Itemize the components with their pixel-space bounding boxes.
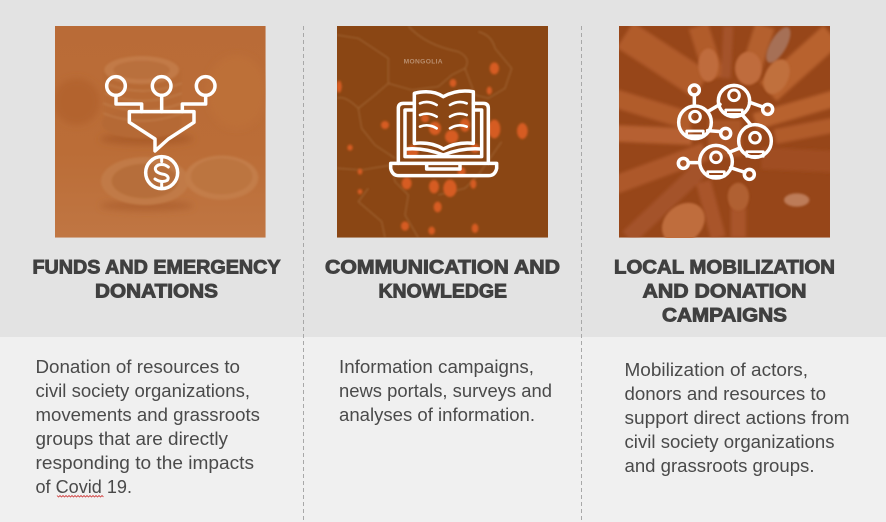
photo: map with orange dots bbox=[336, 26, 548, 238]
text: funds description: movements and grassroots bbox=[36, 404, 260, 425]
text: funds description: groups that are directly bbox=[36, 428, 229, 449]
text: funds description: civil society organizations, bbox=[36, 380, 250, 401]
icon: funnel with coins bbox=[107, 77, 215, 189]
text: local mobilization description: Mobilization of actors, bbox=[624, 359, 808, 380]
text: funds description: Donation of resources to bbox=[36, 356, 240, 377]
text: communication description: analyses of information. bbox=[339, 404, 535, 425]
heading: funds and emergency donations: FUNDS AND EMERGENCY bbox=[32, 258, 281, 278]
text: communication description: news portals, surveys and bbox=[339, 380, 552, 401]
heading: local mobilization and donation campaigns bbox=[614, 258, 835, 326]
photo: hands joined with orange tint bbox=[619, 26, 830, 238]
bottom background band bbox=[0, 337, 886, 522]
heading: local mobilization and donation campaigns: LOCAL MOBILIZATION bbox=[614, 258, 835, 278]
text: communication description bbox=[339, 356, 552, 425]
panel: funds and emergency donations bbox=[32, 26, 281, 497]
text: funds description: responding to the impacts bbox=[36, 452, 254, 473]
text: funds description: of Covid 19. bbox=[36, 476, 132, 497]
top background band bbox=[0, 0, 886, 337]
text: funds description bbox=[36, 356, 260, 497]
heading: communication and knowledge: COMMUNICATION AND bbox=[325, 258, 560, 278]
text: local mobilization description: and grassroots groups. bbox=[624, 455, 814, 476]
heading: funds and emergency donations bbox=[32, 258, 281, 302]
photo: coins with orange tint bbox=[53, 26, 267, 238]
text: communication description: Information campaigns, bbox=[339, 356, 534, 377]
panel: local mobilization and donation campaigns bbox=[614, 24, 850, 476]
photo: map with orange dots: MONGOLIA bbox=[404, 59, 443, 66]
heading: local mobilization and donation campaigns: CAMPAIGNS bbox=[662, 306, 787, 326]
text: local mobilization description: civil society organizations bbox=[624, 431, 834, 452]
icon: connected people network bbox=[678, 85, 773, 179]
lighter hands bbox=[698, 48, 718, 82]
heading: funds and emergency donations: DONATIONS bbox=[95, 282, 218, 302]
heading: local mobilization and donation campaigns: AND DONATION bbox=[642, 282, 806, 302]
icon: laptop with open book bbox=[391, 91, 497, 176]
text: local mobilization description bbox=[624, 359, 850, 476]
text: local mobilization description: support direct actions from bbox=[624, 407, 850, 428]
panel: communication and knowledge bbox=[325, 26, 560, 425]
heading: communication and knowledge bbox=[325, 258, 560, 302]
heading: communication and knowledge: KNOWLEDGE bbox=[378, 282, 507, 302]
text: local mobilization description: donors and resources to bbox=[624, 383, 826, 404]
